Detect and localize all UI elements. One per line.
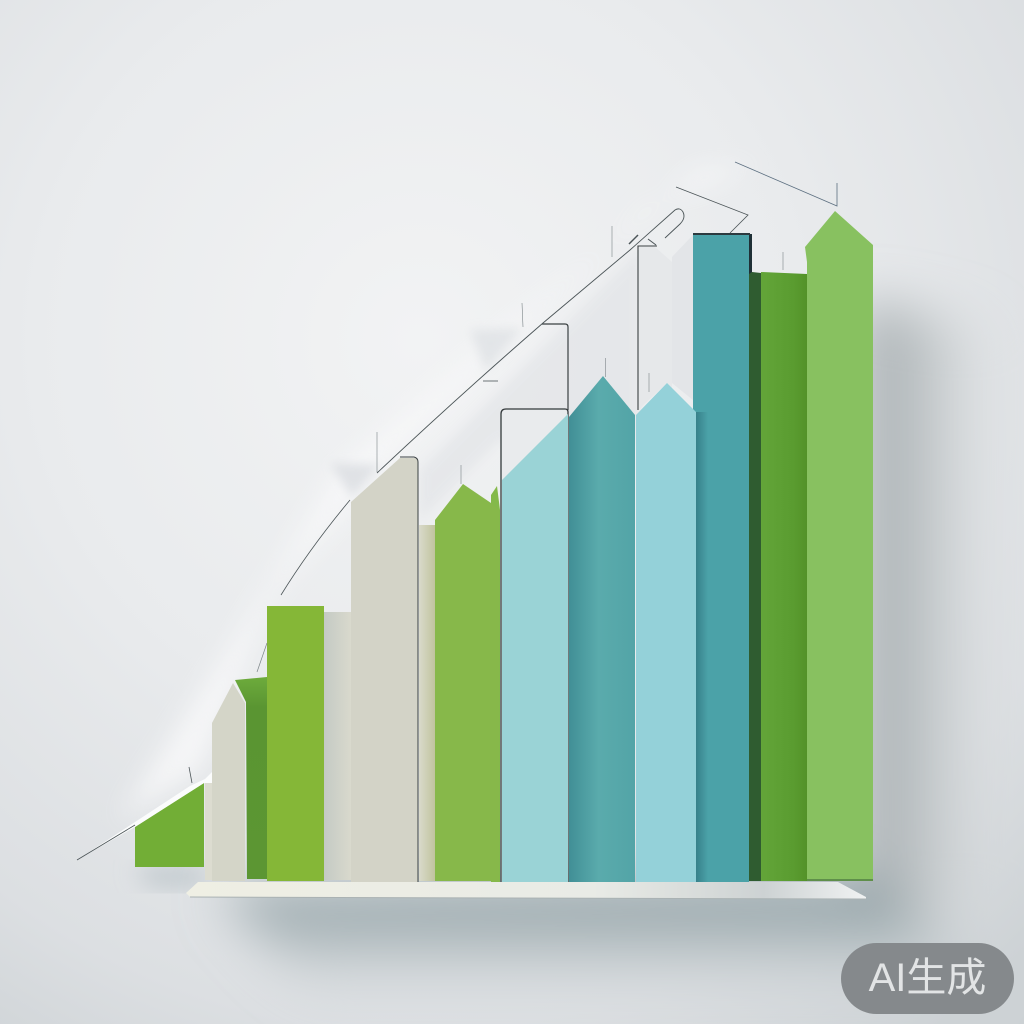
bar 5: green [419, 484, 500, 882]
bar 2: cream with green back [205, 677, 267, 881]
bar 11: bright green [805, 211, 873, 881]
bar 10: dark green [749, 272, 807, 881]
AI badge: AI生成 [869, 956, 986, 1000]
bar 9: teal tall [693, 233, 752, 882]
bar 3: green [267, 606, 324, 881]
AI badge [841, 943, 1014, 1014]
bar 1: green [135, 783, 204, 867]
bar 3 side gap [324, 612, 351, 880]
bar 4: cream [351, 458, 418, 882]
panel outlines behind bars [501, 235, 693, 882]
shelf [186, 882, 866, 899]
trend line and tick marks [77, 162, 837, 882]
bar 6: light blue [502, 414, 568, 882]
bar 8: light blue [636, 383, 696, 882]
bar 7: teal [569, 376, 635, 882]
